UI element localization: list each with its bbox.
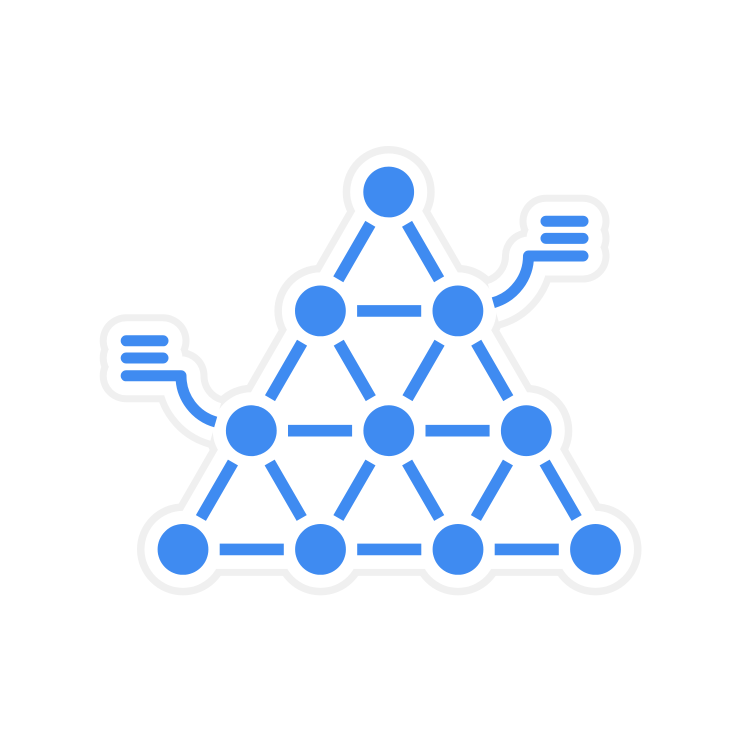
icon: left list callout with connector <box>126 341 216 422</box>
node: bottom row third <box>433 524 483 575</box>
network nodes <box>158 167 621 575</box>
node: second row left <box>295 286 346 336</box>
network connecting lines <box>201 224 577 549</box>
node: third row left <box>226 405 277 456</box>
node: third row centre <box>363 405 414 456</box>
node: bottom row second <box>295 524 346 575</box>
node: bottom row fourth <box>570 524 621 575</box>
node: third row right <box>501 405 552 456</box>
node: top <box>363 167 414 217</box>
sticker outline: grey border and white backing <box>126 146 641 595</box>
node: bottom row first <box>158 524 208 575</box>
icon: right list callout with connector <box>493 221 583 303</box>
node: second row right <box>432 286 483 336</box>
